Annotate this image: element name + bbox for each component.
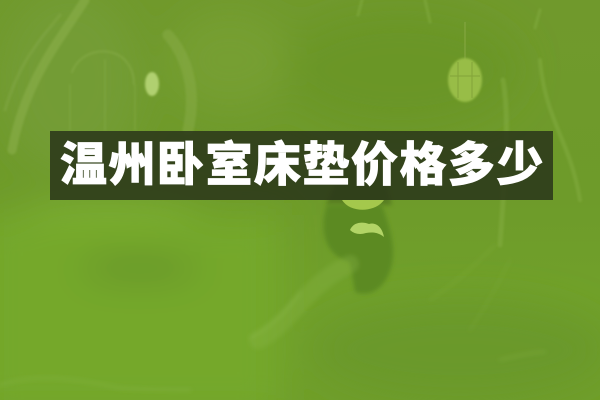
title: 温州卧室床垫价格多少 bbox=[60, 138, 545, 191]
fallen log and grass bbox=[0, 245, 545, 390]
seated figure bbox=[324, 156, 393, 294]
title band bbox=[50, 131, 553, 200]
tree trunks, right bbox=[358, 0, 580, 245]
tree and arch, left bbox=[5, 0, 191, 150]
hanging lantern bbox=[448, 22, 482, 102]
glowing window, left bbox=[145, 72, 159, 96]
